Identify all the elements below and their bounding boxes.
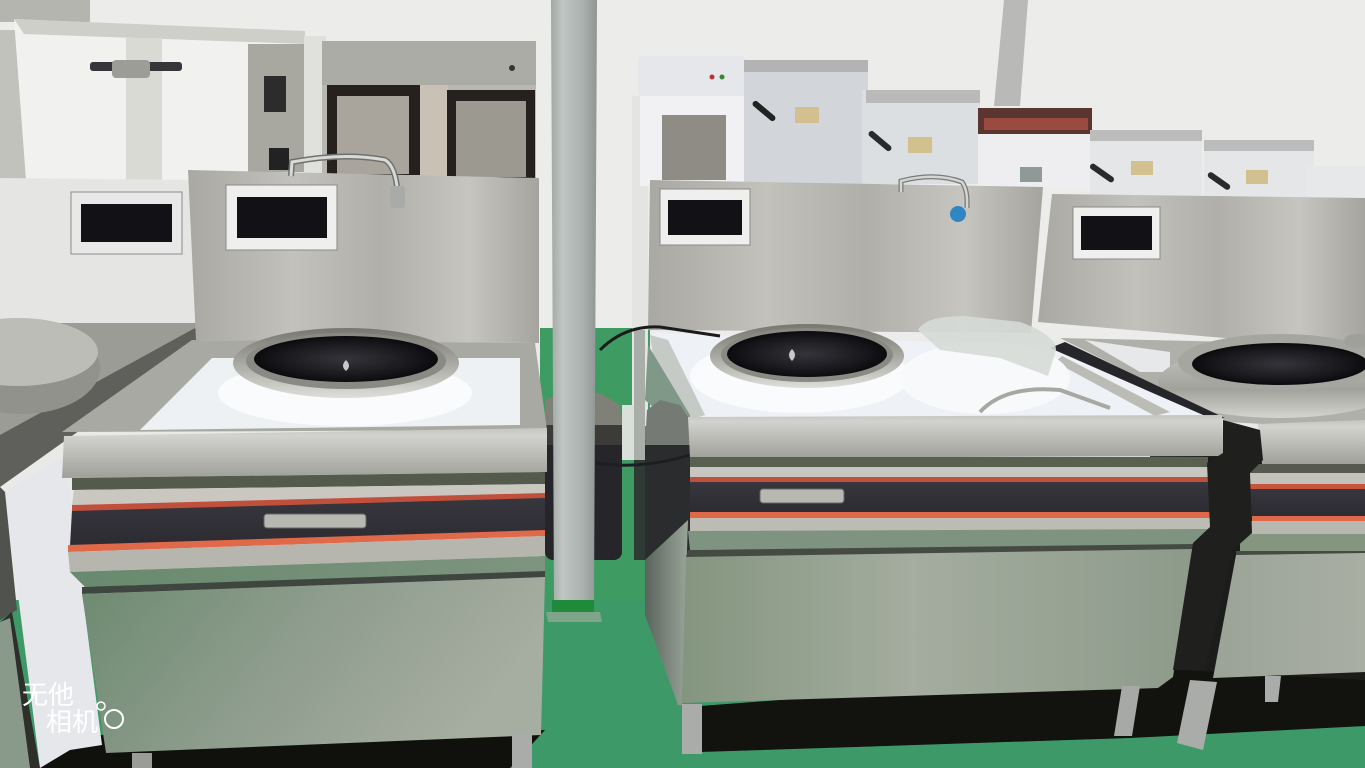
cooker 3 [1038, 194, 1365, 750]
pillar [546, 0, 602, 622]
cooker 2 loose faucet [980, 389, 1110, 412]
cooker 1 backsplash [188, 170, 539, 343]
cooker 2 top [652, 333, 1225, 418]
cooker 2 [596, 177, 1225, 754]
left back cabinets [0, 0, 536, 180]
cooker 2 cabinet [682, 548, 1193, 703]
cooker 3 display [1073, 207, 1160, 259]
far left unit [0, 178, 200, 768]
cooker 3 backsplash [1038, 194, 1365, 350]
cooker 3 top [1060, 338, 1365, 430]
back post and floor reflection [622, 330, 646, 560]
green floor [0, 328, 1365, 768]
right back cabinets [632, 56, 1365, 426]
cooker 1 cabinet [82, 577, 545, 753]
cooker 2 dark band [690, 482, 1210, 513]
cooker 1 wok [233, 328, 459, 398]
watermark: 无他 [22, 680, 74, 710]
cooker 2 backsplash [648, 180, 1043, 333]
cooker 2 hob mound [690, 339, 910, 413]
cooker 1 display [226, 185, 337, 250]
watermark: 相机 [46, 707, 98, 737]
watermark [22, 680, 123, 737]
cooker 1 faucet [291, 156, 405, 208]
far left white side panel [5, 455, 102, 768]
cooker 2 display [660, 189, 750, 245]
cooker 2 front lip [688, 415, 1224, 458]
cooker 2 wok [710, 324, 904, 388]
far left pot [0, 318, 100, 414]
cooker 2 handle [760, 489, 844, 503]
far left display [71, 192, 182, 254]
cooker 1 top [62, 340, 547, 432]
cooker 1 [62, 156, 547, 768]
cooker 1 legs [132, 733, 532, 768]
cooker 3 wok [1158, 334, 1365, 418]
cooker 1 dark band [70, 497, 545, 546]
pot behind pillar [545, 393, 622, 560]
cooker 2 faucet [901, 177, 967, 222]
cooker 2 left glass edge [650, 335, 705, 420]
cooker 2 plastic bag [918, 316, 1056, 376]
back wall [0, 0, 1365, 340]
cooker 3 front lip [1258, 420, 1365, 464]
cooker 2 side [645, 520, 688, 705]
cooker 2 pot [596, 400, 690, 610]
wall column right [994, 0, 1028, 106]
cooker 1 hob mound [218, 360, 472, 426]
cooker 2 legs [682, 686, 1140, 754]
cooker 2 cable [600, 327, 720, 350]
black divider between cookers 2 and 3 [1173, 420, 1263, 670]
cooker 1 front lip [62, 428, 547, 478]
cooker 3 cabinet [1213, 553, 1365, 678]
cooker 3 dark band [1250, 488, 1365, 517]
cooker 3 legs [1177, 676, 1281, 750]
cooker 1 handle [264, 514, 366, 528]
